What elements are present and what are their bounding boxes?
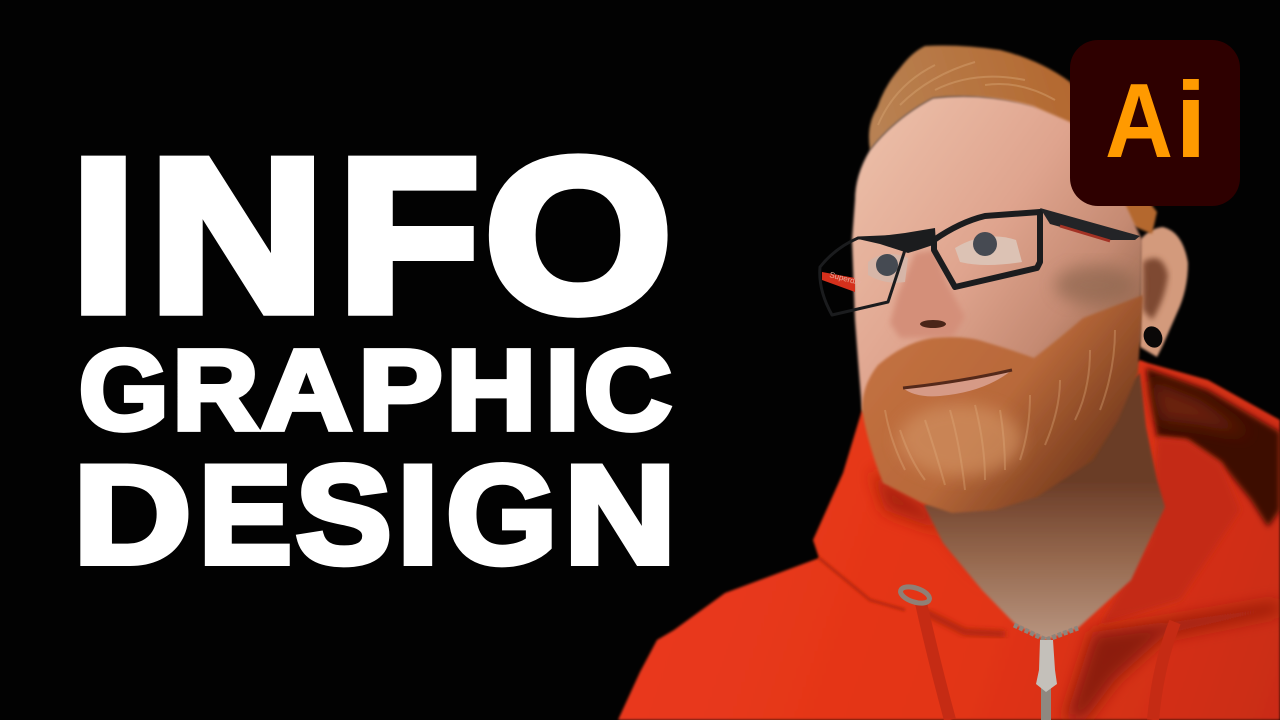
hoodie bbox=[618, 360, 1280, 720]
title line: DESIGN: D bbox=[74, 438, 191, 593]
title line: DESIGN: G bbox=[446, 437, 557, 592]
hood lower edge crease bbox=[1065, 602, 1280, 720]
mouth bbox=[903, 370, 1012, 396]
zipper bbox=[1014, 625, 1078, 720]
drawstring right bbox=[1153, 622, 1175, 720]
left hood crease bbox=[819, 558, 905, 610]
right lens bbox=[934, 212, 1040, 287]
temple arm bbox=[1040, 208, 1140, 240]
temple red strip bbox=[1060, 226, 1110, 241]
hair strands bbox=[878, 62, 1055, 125]
neck bbox=[924, 373, 1165, 640]
shadow under beard on left hood bbox=[872, 470, 990, 590]
face bbox=[852, 96, 1142, 500]
hair bbox=[869, 46, 1157, 234]
title line: GRAPHIC: G bbox=[79, 328, 168, 454]
title line: INFO: I bbox=[72, 115, 135, 357]
icon tile bbox=[1070, 40, 1240, 206]
title line: INFO: F bbox=[338, 115, 479, 357]
eyes bbox=[868, 232, 1022, 283]
hood interior warm glow bbox=[1150, 380, 1250, 435]
title line: DESIGN: I bbox=[398, 438, 438, 593]
ear bbox=[1140, 227, 1188, 357]
drawstring left bbox=[921, 603, 950, 720]
red temple inside lens bbox=[822, 272, 855, 292]
title line: DESIGN: E bbox=[199, 438, 292, 592]
title line: GRAPHIC bbox=[79, 326, 672, 454]
inner ear shadow bbox=[1143, 258, 1168, 320]
title line: GRAPHIC: R bbox=[172, 326, 258, 453]
title line: DESIGN bbox=[74, 436, 676, 593]
glasses bbox=[820, 208, 1140, 315]
cheek shadow bbox=[1055, 265, 1135, 305]
title line: GRAPHIC: P bbox=[358, 327, 443, 453]
nostril bbox=[920, 320, 946, 328]
title line: INFO: O bbox=[485, 115, 672, 357]
beard bbox=[862, 295, 1143, 513]
bridge bbox=[858, 228, 936, 253]
title line: GRAPHIC: A bbox=[261, 327, 352, 453]
ear plug bbox=[1140, 323, 1166, 351]
icon letter i: i bbox=[1175, 59, 1207, 180]
eyelet bbox=[899, 584, 931, 606]
portrait of man in red hoodie bbox=[618, 46, 1280, 720]
nose bbox=[890, 250, 965, 338]
title bbox=[72, 114, 676, 593]
temple logo: Superdry bbox=[828, 270, 862, 287]
left lens bbox=[820, 236, 905, 315]
beard glow bbox=[898, 404, 1022, 476]
inner hood fold shadow bbox=[1100, 437, 1240, 625]
title line: DESIGN: N bbox=[564, 437, 676, 593]
Adobe Illustrator icon bbox=[1070, 40, 1240, 206]
left hood underside crease bbox=[925, 612, 1005, 634]
beard hairs bbox=[885, 330, 1115, 490]
title line: INFO bbox=[72, 114, 672, 357]
icon letter A: A bbox=[1105, 62, 1173, 180]
title line: DESIGN: S bbox=[296, 436, 391, 592]
hood interior shadow bbox=[1146, 368, 1280, 527]
title line: GRAPHIC: I bbox=[546, 326, 579, 453]
title line: GRAPHIC: C bbox=[584, 327, 672, 453]
title line: GRAPHIC: H bbox=[446, 327, 536, 454]
title line: INFO: N bbox=[150, 114, 324, 357]
